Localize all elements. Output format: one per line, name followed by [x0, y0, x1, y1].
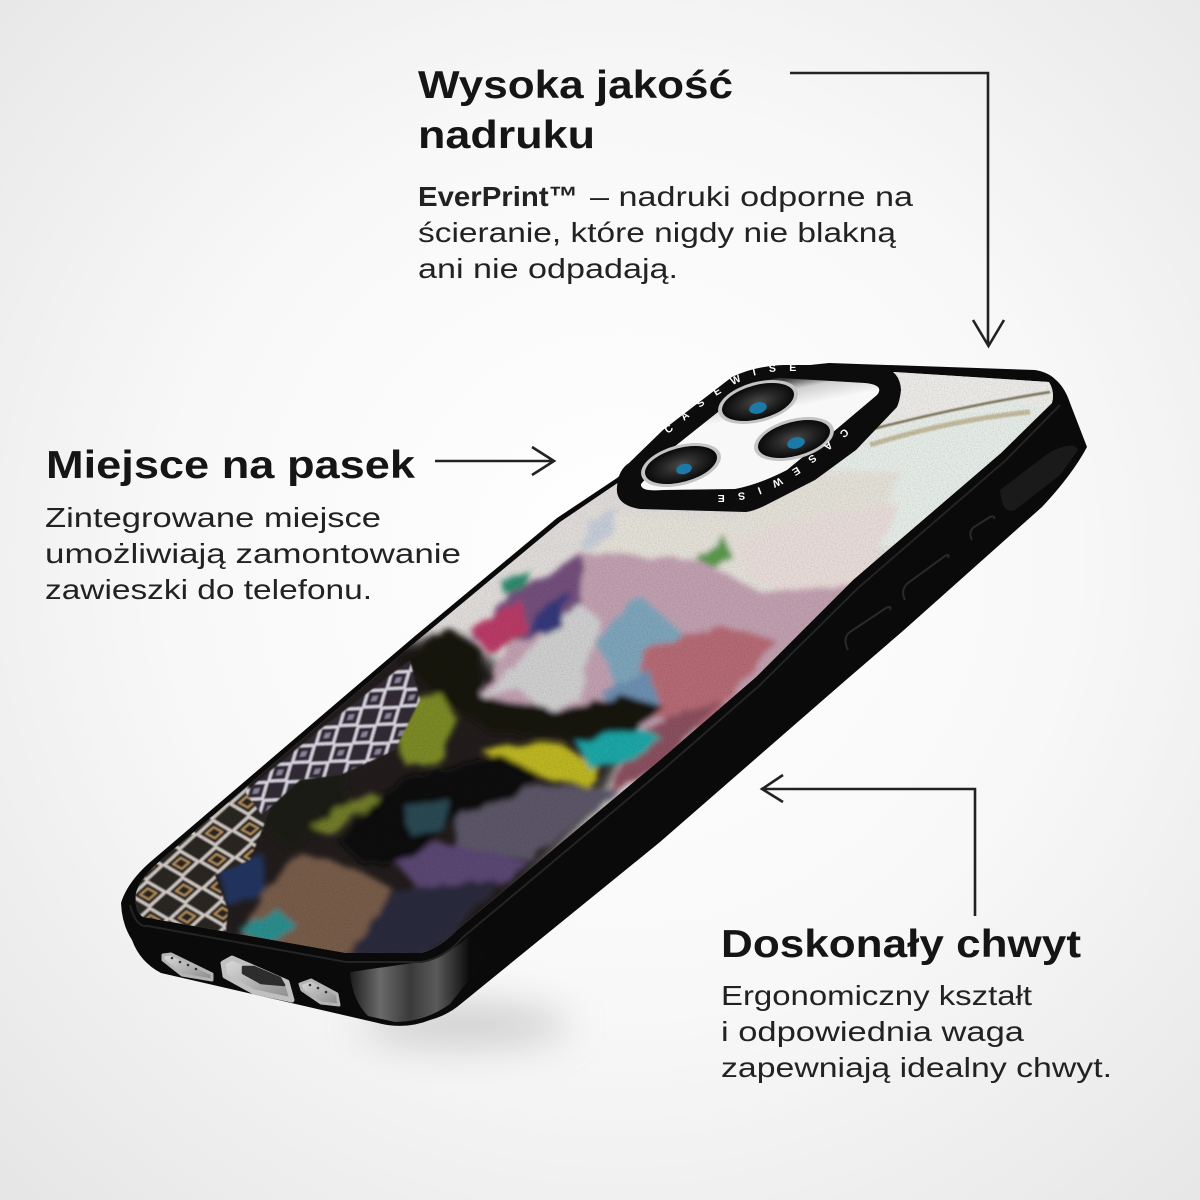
- diamond pattern: lower left: [136, 786, 270, 932]
- body text: – nadruki odporne na: [590, 181, 914, 212]
- heading: Miejsce na pasek: [46, 444, 415, 487]
- body text: [418, 181, 914, 284]
- body text: [45, 502, 461, 605]
- phone drop shadow: [360, 1005, 570, 1045]
- case body: [121, 363, 1087, 1026]
- paint grain: [120, 360, 1070, 970]
- phone case: [121, 363, 1087, 1026]
- heading: Doskonały chwyt: [721, 923, 1081, 966]
- arrow: to back print: [790, 73, 1004, 346]
- brand lettering: CASEWISE: [718, 430, 848, 502]
- side switch: [1000, 445, 1078, 511]
- torn paper streaks: [850, 392, 1050, 445]
- camera island: [616, 365, 901, 512]
- rim edge: [130, 405, 1060, 962]
- volume and side buttons: [845, 516, 994, 650]
- body text: Zintegrowane miejsce: [45, 502, 381, 533]
- glossy corner highlight: [350, 935, 485, 1022]
- body text: zapewniają idealny chwyt.: [721, 1052, 1112, 1083]
- body text: ani nie odpadają.: [418, 253, 678, 284]
- heading: nadruku: [418, 114, 595, 157]
- callout: strap slot: [45, 444, 461, 605]
- body text: EverPrint™: [418, 181, 578, 212]
- callout: perfect grip: [721, 923, 1112, 1083]
- body text: i odpowiednia waga: [721, 1016, 1025, 1047]
- right speaker grille: [300, 980, 339, 1005]
- diamond pattern: upper strip: [245, 660, 420, 815]
- body text: [721, 980, 1112, 1083]
- brand lettering: CASEWISE: [665, 365, 796, 432]
- heading: Wysoka jakość: [418, 64, 733, 107]
- left speaker grille: [163, 954, 212, 980]
- camera lenses: [636, 372, 839, 495]
- charging port: [223, 958, 292, 1000]
- camera window: [641, 378, 879, 490]
- body text: zawieszki do telefonu.: [45, 574, 372, 605]
- body text: Ergonomiczny kształt: [721, 980, 1032, 1011]
- heading: [418, 64, 733, 157]
- speaker holes: [171, 957, 327, 993]
- artwork on back: [120, 360, 1070, 970]
- callout: print quality: [418, 64, 914, 284]
- arrow: to strap slot: [435, 447, 554, 475]
- body text: ścieranie, które nigdy nie blakną: [418, 217, 897, 248]
- arrow: to case side: [762, 775, 975, 916]
- brand lettering: [665, 365, 848, 502]
- body text: umożliwiają zamontowanie: [45, 538, 461, 569]
